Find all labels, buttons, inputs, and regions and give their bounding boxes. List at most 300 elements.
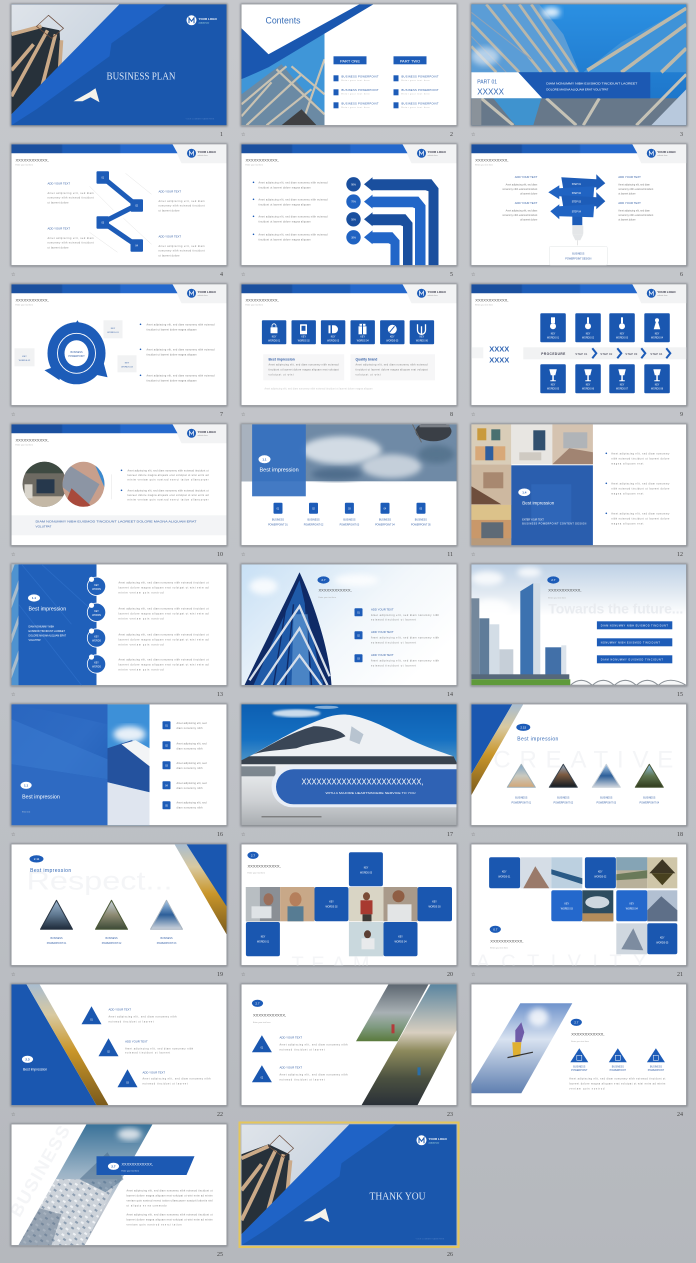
slide 13 marks: 13 [217,692,223,698]
triangles: 01 [261,1047,264,1049]
slide 16 marks: ☆ [11,832,16,838]
slide 10 marks: ☆ [11,552,16,558]
blue panel [252,424,306,496]
triangles: 02 [107,1051,110,1053]
triangles: 01 [90,1019,93,1021]
top medal cards: KEY [620,333,625,335]
bent arrows [364,177,438,265]
slide 3 marks: ☆ [471,132,476,138]
key word boxes: KEY [125,362,130,364]
blue panel: ENTER YOUR TEXT [522,519,544,521]
title: BUSINESS PLAN [106,70,176,82]
key word tiles: WORDS 03 [561,908,574,910]
key word tiles [489,857,677,954]
list: 02 [357,635,360,637]
watermark: Towards the future... [548,600,683,616]
part one list: BUSINESS POWERPOINT [342,101,379,105]
panel: best impression: volutpat ut wisi [268,373,294,376]
key word tiles: WORDS 02 [594,876,607,878]
slide 22 marks [11,1112,223,1118]
paragraphs: laoreet dolore magna aliquam erat volutpat ut wisi enim ad minim [126,1218,212,1221]
signpost arrows [548,174,605,225]
icons and labels: 03 [348,508,351,510]
slide 10 marks [11,552,223,558]
slide 23: hiking photos [242,984,456,1106]
top medal cards: WORDS 04 [651,337,664,339]
procedure band: STEP 03 [625,352,638,356]
paragraphs: ut aliquip ex ea commodo [126,1204,167,1207]
slide 4: zigzag diagram [12,144,226,266]
triangle labels: BUSINESS [515,796,528,799]
slide 8 marks: 8 [450,412,453,418]
part one list: BUSINESS POWERPOINT [342,74,379,78]
circle labels: KEY [94,636,99,638]
slide 19 marks [11,972,223,978]
text: lower left: ADD YOUR TEXT [48,226,70,230]
key word boxes: WORDS 01 [107,332,119,334]
photo triangles [40,900,182,929]
right text: nonummy nibh euismod tincidunt [618,214,654,217]
badge and heading: 2.15 [520,725,527,729]
slide 21 marks: ☆ [471,972,476,978]
blue panel: Best impression [260,467,299,473]
top medal cards [540,313,670,342]
text: lower right: nonummy nibh euismod tincidunt [158,249,205,252]
percent circles: 90% [351,184,356,186]
blue corner [186,844,226,906]
key word tiles: WORDS 01 [257,941,270,943]
slide 18 marks: ☆ [471,832,476,838]
header: website here [657,154,668,157]
icons and labels: POWERPOINT 02 [304,523,324,526]
panel: quality brand [350,354,435,380]
list: Amet adipiscing elit, sed diam nonummy nibh [371,636,440,639]
part one tag: PART ONE [340,58,360,63]
icons and labels: POWERPOINT 01 [268,523,288,526]
circle labels: WORDS [92,589,101,591]
list: 01 [357,612,360,614]
footer note: YOUR COMPANY NAME HERE [186,117,215,120]
section badge and heading: 2.7 [321,578,326,582]
key word tiles: WORDS 02 [326,906,338,908]
header: XXXXXXXXXXXX, [16,297,49,302]
header: website here [657,294,668,297]
slide 6: signpost [471,144,686,266]
right text: ADD YOUR TEXT [618,175,641,179]
list: euismod tincidunt ut laoreet [371,618,416,621]
key word boxes: KEY [111,328,116,330]
text rows: Amet adipiscing elit, sed diam nonummy nibh [280,1043,348,1046]
part one list: BUSINESS POWERPOINT [342,88,379,92]
triangle labels: POWERPOINT 01 [511,801,532,804]
bullet text [140,323,215,382]
header: XXXXXXXXXXXX, [246,157,279,162]
triangle labels: BUSINESS [612,1065,624,1068]
bullet text: tincidunt ut laoreet dolore magna aliquam [258,220,310,223]
paragraph: laoreet dolore magna aliquam erat volutpat ut wisi enim ad minim [569,1082,665,1085]
key word circles [87,577,106,673]
key word tiles: KEY [398,936,403,938]
badge and heading: Enter your text here [490,946,509,949]
blue panel: DOLORE MAGNA ALIQUAM ERAT [28,634,67,637]
slide 18 marks [471,832,683,838]
slide 8: six icon cards [242,284,456,406]
text: lower left: Amet adipiscing elit, sed diam [48,237,94,240]
blue photo panel [12,704,108,825]
footer note: YOUR COMPANY NAME HERE [416,1237,445,1240]
top medal cards: WORDS 01 [547,337,560,339]
slide 2 marks: 2 [450,132,453,138]
triangles: 02 [261,1077,264,1079]
slide 18 marks: 18 [677,832,683,838]
slide 10 marks: 10 [217,552,223,558]
text rows: laoreet dolore magna aliquam erat volutpat ut wisi enim ad [118,638,209,641]
zigzag: 03 [102,222,105,224]
slide 5 marks: ☆ [241,272,246,278]
part one list: Enter your text here [342,79,370,82]
header [12,144,226,166]
paragraphs: laoreet dolore magna aliquam erat volutpat ut wisi enim ad minim [126,1194,212,1197]
icon cards: KEY [420,336,425,338]
number list: Amet adipiscing elit, sed [176,782,207,785]
bottom trophy cards: KEY [620,384,625,386]
text: upper left: Amet adipiscing elit, sed diam [48,192,94,195]
glass building photo [471,4,686,125]
header: XXXXXXXXXXXX, [475,297,508,302]
bullet text: tincidunt ut laoreet dolore magna aliquam [258,186,310,189]
key word tiles: KEY [364,867,369,869]
badge and heading: 2.7 [255,1001,260,1005]
cover photo: tower and sky [12,4,122,114]
number list: Amet adipiscing elit, sed [176,801,207,804]
slide 5: bent arrows [242,144,456,266]
slide 24 number: 24 [677,1112,683,1118]
photo: upper hiker [356,984,428,1041]
header: YOUR LOGO [657,290,676,294]
key word tiles: WORDS 04 [394,941,407,943]
blue photo panel: Best impression [22,794,60,800]
triangle labels: POWERPOINT 02 [553,801,574,804]
signpost arrows: STEP 01 [572,184,582,186]
left text: nonummy nibh euismod tincidunt [502,214,538,217]
slide 12 marks [471,552,683,558]
watermark: ACTIVITY [476,951,646,973]
key word tiles: KEY [432,901,437,903]
blue corner: Best impression [23,1067,47,1071]
blue photo panel: 1.1 [24,783,29,787]
key word boxes [14,320,136,372]
number list: diam nonummy nibh [176,747,203,750]
slide 13 marks [11,692,223,698]
left text: nonummy nibh euismod tincidunt [502,188,538,191]
slide 7 marks: 7 [220,412,223,418]
caption box [549,246,607,265]
blue panel: VOLUTPAT [28,639,41,642]
icons and labels: BUSINESS [415,518,427,521]
slide 11: earth photo [242,424,456,546]
part one list [334,74,379,109]
signpost arrows: STEP 03 [572,201,582,203]
badge and heading [547,576,581,599]
bottom trophy cards: WORDS 08 [651,388,664,390]
bullet text: magna aliquam erat [611,462,644,465]
blue pill banner: XXXXXXXXXXXXXXXXXXXXXXXX, [302,777,424,786]
bridge arches [570,680,686,685]
blue pill banner: WITH A MAJORE HEARTSINCERE SERVICE TO YOU [326,791,416,795]
slide 12 marks: ☆ [471,552,476,558]
blue corner [471,704,512,774]
slide 21 marks [471,972,683,978]
blue corner [12,984,96,1105]
zigzag: 04 [135,245,139,247]
paragraph [569,1077,666,1090]
triangle labels: BUSINESS [600,796,613,799]
bottom trophy cards: KEY [655,384,660,386]
right text: Amet adipiscing elit, sed diam [618,209,650,212]
slide 12: photo mosaic [471,424,686,546]
triangle labels: BUSINESS [573,1065,586,1068]
caption box: POWERPOINT DESIGN [565,257,592,260]
zigzag: 02 [135,205,139,207]
part two list: Enter your text here [402,106,430,109]
icons and labels: POWERPOINT 04 [375,523,395,526]
procedure band: STEP 04 [650,352,663,356]
slide 8 marks [241,412,453,418]
left text: ADD YOUR TEXT [515,175,538,179]
header: website here [198,154,208,157]
text rows: ADD YOUR TEXT [280,1035,302,1039]
slide 7 marks [11,412,223,418]
slide 12 marks: 12 [677,552,683,558]
blue panel: 1.1 [32,596,36,600]
key word tiles: WORDS 03 [428,906,441,908]
key word tiles: KEY [261,936,266,938]
text rows: Amet adipiscing elit, sed diam nonummy nibh euismod tincidunt ut [118,658,209,661]
logo [416,1135,448,1145]
paragraphs: Amet adipiscing elit, sed diam nonummy nibh euismod tincidunt ut [126,1189,213,1192]
bullet text: Amet adipiscing elit, sed diam nonummy nibh euismod [258,215,328,218]
bullet text: laoreet dolore magna aliquam erat volutpat ut wisi enim ad [128,474,209,477]
number list: 02 [165,745,168,747]
contents photo [242,34,324,126]
icon: paper mountain [74,88,100,102]
header: XXXXXXXXXXXX, [16,157,49,162]
triangle labels: BUSINESS [50,937,63,940]
icon cards: KEY [360,336,365,338]
skier photo [471,1003,572,1093]
buttons: DIAM NONUMMY EUISMOD TINCIDUNT [601,658,663,661]
text rows: euismod tincidunt ut laoreet [142,1082,188,1085]
slide 21: activity grid [471,844,686,973]
icons and labels: BUSINESS [343,518,356,521]
slide 20 marks: ☆ [241,972,246,978]
header: website here [198,434,208,437]
watermark: BUSINESS [6,1122,74,1220]
skyline photo [471,583,570,685]
text rows: minim veniam quis nostrud [118,591,164,594]
blue photo panel: Enter text [22,810,31,813]
bottom trophy cards: WORDS 07 [616,388,629,390]
list: ADD YOUR TEXT [371,607,394,611]
icon cards: WORDS 04 [357,340,369,342]
icon cards: KEY [390,336,395,338]
key word tiles: KEY [598,871,603,873]
icons and labels: BUSINESS [379,518,391,521]
slide 4 marks [11,272,223,278]
header: Enter your text here [16,303,34,306]
key word tiles: WORDS 05 [360,872,373,874]
percent circles [346,177,361,245]
paragraph: Amet adipiscing elit, sed diam nonummy nibh euismod tincidunt ut [569,1077,666,1080]
header: website here [198,294,208,297]
section badge and heading: XXXXXXXXXXXX, [318,587,352,592]
logo [186,15,218,25]
blue banner [96,1156,194,1175]
triangle labels: POWERPOINT [571,1069,588,1072]
slide 4 marks: ☆ [11,272,16,278]
slide 11 marks [241,552,453,558]
bullet text: Amet adipiscing elit, sed diam nonummy nibh euismod tincidunt ut [128,489,209,492]
top medal cards: KEY [655,333,660,335]
key word boxes: KEY [22,356,27,358]
text rows: ADD YOUR TEXT [125,1039,148,1043]
logo: website here [198,21,209,24]
header: XXXXXXXXXXXX, [16,437,49,442]
bullet text: laoreet dolore magna aliquam erat volutpat ut wisi enim ad [128,494,209,497]
slide 23 number: 23 [447,1112,453,1118]
left text: Amet adipiscing elit, sed diam [506,209,537,212]
xxxx label: XXXX [489,355,509,364]
badge and heading: XXXXXXXXXXXX, [548,587,581,592]
panel: best impression [263,354,344,380]
icons and labels: POWERPOINT 03 [340,523,360,526]
slide 9: procedure [471,284,686,406]
text: upper right: ADD YOUR TEXT [158,189,181,193]
icons and labels: 02 [312,508,315,510]
top medal cards: WORDS 03 [616,337,629,339]
slide 17 marks [241,832,453,838]
header: website here [428,294,438,297]
bullet text: tincidunt ut laoreet dolore magna aliquam [258,238,310,241]
number list: diam nonummy nibh [176,806,203,809]
slide 15 number: 15 [677,692,683,698]
number list: Amet adipiscing elit, sed [176,722,207,725]
paragraphs: Amet adipiscing elit, sed diam nonummy nibh euismod tincidunt ut [126,1213,213,1216]
top medal cards: KEY [586,333,591,335]
slide 3: part 01 [471,4,686,126]
list: Amet adipiscing elit, sed diam nonummy nibh [371,614,440,617]
cycle ring: POWERPOINT [68,355,85,358]
text: lower right: ut laoreet dolore [158,254,180,257]
blue banner: DOLORE MAGNA ALIQUAM ERAT VOLUTPAT [546,87,609,91]
badge and heading: 0.7 [493,927,498,931]
bottom banner: DIAM NONUMMY NIBH EUISMOD TINCIDUNT LAOREET DOLORE MAGNA ALIQUAM ERAT [36,519,197,523]
header: website here [428,154,438,157]
divider [110,474,113,499]
part two list: BUSINESS POWERPOINT [402,88,439,92]
icon cards: KEY [301,336,306,338]
slide 16 marks [11,832,223,838]
key word tiles [246,852,452,956]
icon cards [262,320,434,344]
blue banner: 2.7 [111,1164,116,1168]
slide 13: blue side panel [12,564,226,686]
slide 4 marks: 4 [220,272,223,278]
signpost arrows: STEP 04 [572,211,582,213]
cover photo: tower and sky [242,1124,352,1234]
text: upper left [48,181,94,204]
badge and heading: XXXXXXXXXXXX, [490,938,523,943]
list: Amet adipiscing elit, sed diam nonummy nibh [371,659,440,662]
triangle labels: POWERPOINT [648,1069,665,1072]
header: YOUR LOGO [198,430,217,434]
slide 2: contents [242,4,456,126]
gold photo strip [26,984,108,1105]
blue panel [18,564,96,685]
icons and labels [268,503,431,526]
header: XXXXXXXXXXXX, [475,157,508,162]
triangle labels: BUSINESS [650,1065,662,1068]
text rows: laoreet dolore magna aliquam erat volutpat ut wisi enim ad [118,663,209,666]
icon cards: WORDS 06 [416,340,429,342]
triangle labels: BUSINESS [557,796,570,799]
slide 24: skier [471,984,686,1106]
circle labels [89,577,101,668]
text: lower right [158,234,205,257]
part label [471,72,542,98]
slide 7: cycle diagram [12,284,226,406]
triangle labels: POWERPOINT [610,1069,627,1072]
number list: diam nonummy nibh [176,767,203,770]
triangle labels [511,796,660,804]
text: lower left: ut laoreet dolore [48,246,69,249]
icon cards: WORDS 02 [298,340,310,342]
icon cards: KEY [272,336,277,338]
text: lower left: nonummy nibh euismod tincidunt [48,241,94,244]
bullet text: minim veniam quis nostrud exerci tation ullamcorper [128,498,209,501]
blue corner: 2.3 [25,1057,30,1061]
key word tiles: WORDS 04 [626,908,639,910]
key word boxes: WORDS 02 [19,360,31,362]
section badge and heading [318,576,352,599]
badge and heading: Best impression [30,868,71,874]
blue banner: Enter your text here [122,1169,140,1172]
text: upper right: ut laoreet dolore [158,209,180,212]
bulb base [572,225,583,245]
slide 21 marks: 21 [677,972,683,978]
blue panel: 1.4 [522,490,527,494]
bullet text [606,452,670,525]
left text: ut laoreet dolore [520,218,538,221]
key word tiles: KEY [660,937,665,939]
icons and labels: BUSINESS [307,518,320,521]
header: Enter your text here [16,163,34,166]
key word tiles: KEY [564,903,570,905]
photo triangles [507,764,663,787]
slide 26 highlight frame [240,1122,458,1247]
paragraph: veniam quis nostrud [569,1087,605,1090]
icons and labels: 05 [420,508,423,510]
text rows: ADD YOUR TEXT [142,1070,165,1074]
bullet text [121,469,209,501]
badge and heading: 2.7 [551,578,556,582]
text rows: Amet adipiscing elit, sed diam nonummy nibh [108,1015,177,1018]
paragraphs: veniam quis nostrud exerci tation ullamcorper suscipit lobortis nisl [126,1199,213,1202]
right text: nonummy nibh euismod tincidunt [618,188,654,191]
header [242,144,456,166]
header: YOUR LOGO [428,150,447,154]
slide 9 marks: 9 [680,412,683,418]
